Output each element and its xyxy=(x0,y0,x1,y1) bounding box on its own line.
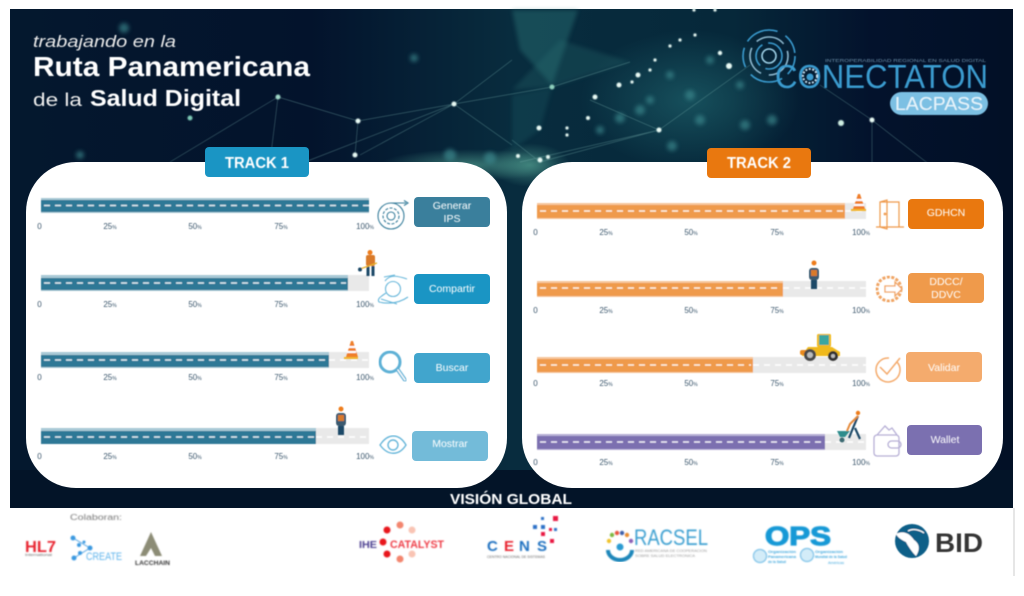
panel: track 1 xyxy=(26,147,507,488)
button: DDCC/DDVC: DDVC xyxy=(931,289,961,301)
road: Generar IPS, complete: 50% xyxy=(188,222,202,231)
road: Generar IPS, complete: 25% xyxy=(103,222,117,231)
button: Wallet: Wallet xyxy=(931,434,959,446)
road: Mostrar: 100% xyxy=(356,452,374,461)
heading: track 2 badge: TRACK 2 xyxy=(727,155,791,172)
button: Compartir xyxy=(414,274,490,304)
logo: Conectaton LACPASS: INTEROPERABILIDAD REGIONAL EN SALUD DIGITAL xyxy=(825,58,987,63)
icon: worker from behind xyxy=(809,260,819,289)
road: DDCC/DDVC: 100% xyxy=(852,306,870,315)
logo: OPS: Mundial de la Salud xyxy=(815,555,848,559)
button: Mostrar xyxy=(412,431,488,461)
road: Generar IPS, complete: 0 xyxy=(37,222,42,231)
title block: trabajando en la xyxy=(33,33,176,51)
icon: worker with wheelbarrow xyxy=(837,411,860,442)
road: Mostrar: 25% xyxy=(103,452,117,461)
road: GDHCN: 50% xyxy=(684,228,698,237)
logo: CENS: CENTRO NACIONAL DE SISTEMAS xyxy=(487,555,546,559)
road: GDHCN: 0 xyxy=(533,228,538,237)
logo: OPS xyxy=(754,521,848,565)
title block: de la xyxy=(33,90,83,110)
road: Mostrar xyxy=(37,428,374,461)
logo: CENS: S xyxy=(537,538,547,555)
logo: BID: BID xyxy=(935,528,983,558)
icon: door xyxy=(876,200,904,229)
icon: check circle xyxy=(876,358,900,382)
road: DDCC/DDVC xyxy=(533,281,870,315)
road: Generar IPS, complete: 75% xyxy=(274,222,288,231)
logo: BID xyxy=(895,524,983,558)
logo: LACCHAIN: LACCHAIN xyxy=(135,561,170,567)
road: Validar: 100% xyxy=(852,379,870,388)
road: Mostrar: 0 xyxy=(37,452,42,461)
icon: traffic cone xyxy=(851,194,866,211)
road: DDCC/DDVC: 75% xyxy=(770,306,784,315)
road: Buscar xyxy=(37,352,374,382)
road: Buscar: 25% xyxy=(103,373,117,382)
logo: HL7: HL7 xyxy=(25,539,56,556)
road: Buscar: 0 xyxy=(37,373,42,382)
logo: OPS: Organización xyxy=(815,550,844,554)
road: Wallet xyxy=(533,434,870,467)
road: Mostrar: 75% xyxy=(274,452,288,461)
logo: IHE Catalyst: IHE xyxy=(359,540,377,551)
road: Validar: 50% xyxy=(684,379,698,388)
logo: RACSEL: RACSEL xyxy=(634,525,708,550)
road: Buscar: 75% xyxy=(274,373,288,382)
road: GDHCN: 100% xyxy=(852,228,870,237)
icon: gear with exit arrow xyxy=(877,277,902,301)
icon: worker from behind xyxy=(336,406,346,435)
logo: Conectaton LACPASS: LACPASS xyxy=(895,94,983,114)
road: Compartir xyxy=(37,275,374,309)
panel: track 2 xyxy=(522,148,1003,488)
road: Compartir: 25% xyxy=(103,300,117,309)
road: Buscar: 100% xyxy=(356,373,374,382)
icon: eye xyxy=(380,436,406,453)
logo: OPS: Organización xyxy=(768,550,797,554)
road: Compartir: 100% xyxy=(356,300,374,309)
right edge line xyxy=(1013,508,1015,576)
logo: OPS: Américas xyxy=(828,561,844,565)
logo: IHE Catalyst xyxy=(359,522,444,562)
logo: CENS: E xyxy=(504,538,514,555)
title block xyxy=(33,33,310,111)
road: GDHCN: 75% xyxy=(770,228,784,237)
button: DDCC/DDVC: DDCC/ xyxy=(929,276,963,288)
road: Compartir: 0 xyxy=(37,300,42,309)
icon: worker with shovel xyxy=(358,250,377,276)
button: Generar IPS: IPS xyxy=(444,213,460,225)
icon: gear with arrow xyxy=(378,200,408,229)
road: Wallet: 25% xyxy=(599,458,613,467)
logo: CENS: C xyxy=(487,538,498,555)
road: Validar: 0 xyxy=(533,379,538,388)
road: Wallet: 75% xyxy=(770,458,784,467)
road: Compartir: 50% xyxy=(188,300,202,309)
heading: track 1 badge: TRACK 1 xyxy=(225,155,289,172)
heading: track 2 badge xyxy=(707,148,811,178)
logo: LACCHAIN xyxy=(135,532,170,567)
icon: sharing hands xyxy=(378,275,408,304)
button: Validar xyxy=(906,352,982,382)
button: Compartir: Compartir xyxy=(429,283,476,295)
icon: road roller xyxy=(800,334,840,361)
road: Wallet: 100% xyxy=(852,458,870,467)
road: Generar IPS, complete: 100% xyxy=(356,222,374,231)
button: GDHCN: GDHCN xyxy=(927,207,965,219)
road: Generar IPS, complete xyxy=(37,198,374,231)
logo: OPS: OPS xyxy=(765,521,831,551)
button: Generar IPS xyxy=(414,197,490,227)
logo: Conectaton LACPASS xyxy=(743,30,988,115)
logo: RACSEL xyxy=(607,525,708,560)
logo: IHE Catalyst: CATALYST xyxy=(390,539,444,551)
button: Mostrar: Mostrar xyxy=(432,438,468,450)
button: Buscar: Buscar xyxy=(436,362,469,374)
button: Buscar xyxy=(414,353,490,383)
button: Generar IPS: Generar xyxy=(433,200,472,212)
road: DDCC/DDVC: 0 xyxy=(533,306,538,315)
icon: wallet xyxy=(874,426,901,456)
title block: Salud Digital xyxy=(90,85,241,111)
road: Buscar: 50% xyxy=(188,373,202,382)
title block: Ruta Panamericana xyxy=(33,51,310,82)
logos: collaborators: Colaboran: xyxy=(70,513,122,522)
road: Mostrar: 50% xyxy=(188,452,202,461)
logos: collaborators xyxy=(25,513,170,567)
button: DDCC/DDVC xyxy=(908,273,984,303)
road: Wallet: 50% xyxy=(684,458,698,467)
logo: CENS xyxy=(487,516,558,559)
road: GDHCN: 25% xyxy=(599,228,613,237)
logo: HL7: International xyxy=(25,553,52,557)
road: Validar: 75% xyxy=(770,379,784,388)
icon: traffic cone xyxy=(344,341,358,359)
logo: RACSEL: RED AMERICANA DE COOPERACION xyxy=(635,548,707,553)
logo: CENS: N xyxy=(519,538,530,555)
heading: track 1 badge xyxy=(205,147,309,177)
road: DDCC/DDVC: 50% xyxy=(684,306,698,315)
blurred teal bokeh xyxy=(76,23,777,164)
logo: CREATE xyxy=(70,536,122,563)
logo: Conectaton LACPASS: CONECTATON xyxy=(775,58,988,95)
button: Validar: Validar xyxy=(928,362,960,374)
logo: CREATE: CREATE xyxy=(86,551,122,563)
heading: vision global: VISIÓN GLOBAL xyxy=(450,490,572,508)
button: Wallet xyxy=(907,425,982,455)
road: Validar xyxy=(533,357,870,388)
logo: OPS: de la Salud xyxy=(768,560,787,564)
logo: RACSEL: SOBRE SALUD ELECTRONICA xyxy=(635,553,695,558)
road: DDCC/DDVC: 25% xyxy=(599,306,613,315)
road: Compartir: 75% xyxy=(274,300,288,309)
road: Wallet: 0 xyxy=(533,458,538,467)
road: Validar: 25% xyxy=(599,379,613,388)
road: GDHCN xyxy=(533,203,870,237)
button: GDHCN xyxy=(908,199,984,229)
icon: magnifier xyxy=(380,352,405,380)
logo: OPS: Panamericana xyxy=(768,555,797,559)
